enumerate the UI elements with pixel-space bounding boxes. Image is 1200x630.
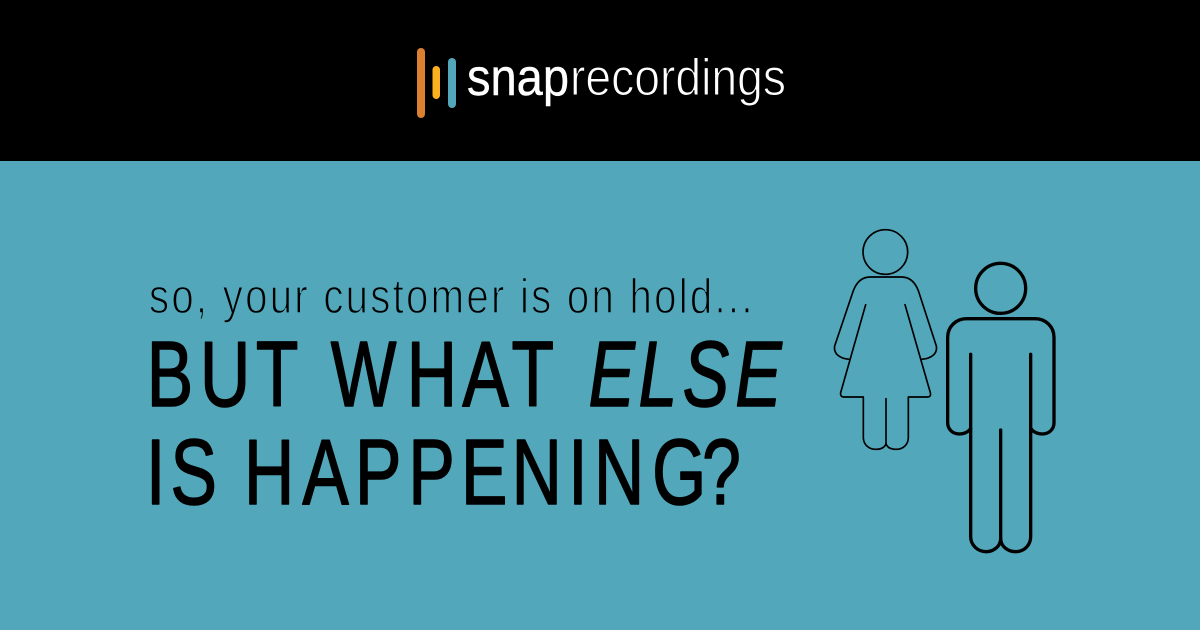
heading line 2: IS HAPPENING? [146, 421, 741, 524]
icon: man outline [948, 263, 1054, 552]
heading line 1 [147, 323, 783, 426]
heading text: ELSE: ELSE [588, 323, 783, 426]
logo: snaprecordings [417, 48, 786, 118]
subheading: so, your customer is on hold... [149, 269, 753, 324]
panel: black header [0, 0, 1200, 161]
icon: logo sound bars [417, 48, 456, 118]
logo wordmark: recordings: recordings [570, 49, 786, 107]
icon: woman outline [834, 230, 937, 449]
logo wordmark: snap: snap [467, 49, 569, 107]
heading text: BUT WHAT: BUT WHAT [147, 323, 554, 426]
